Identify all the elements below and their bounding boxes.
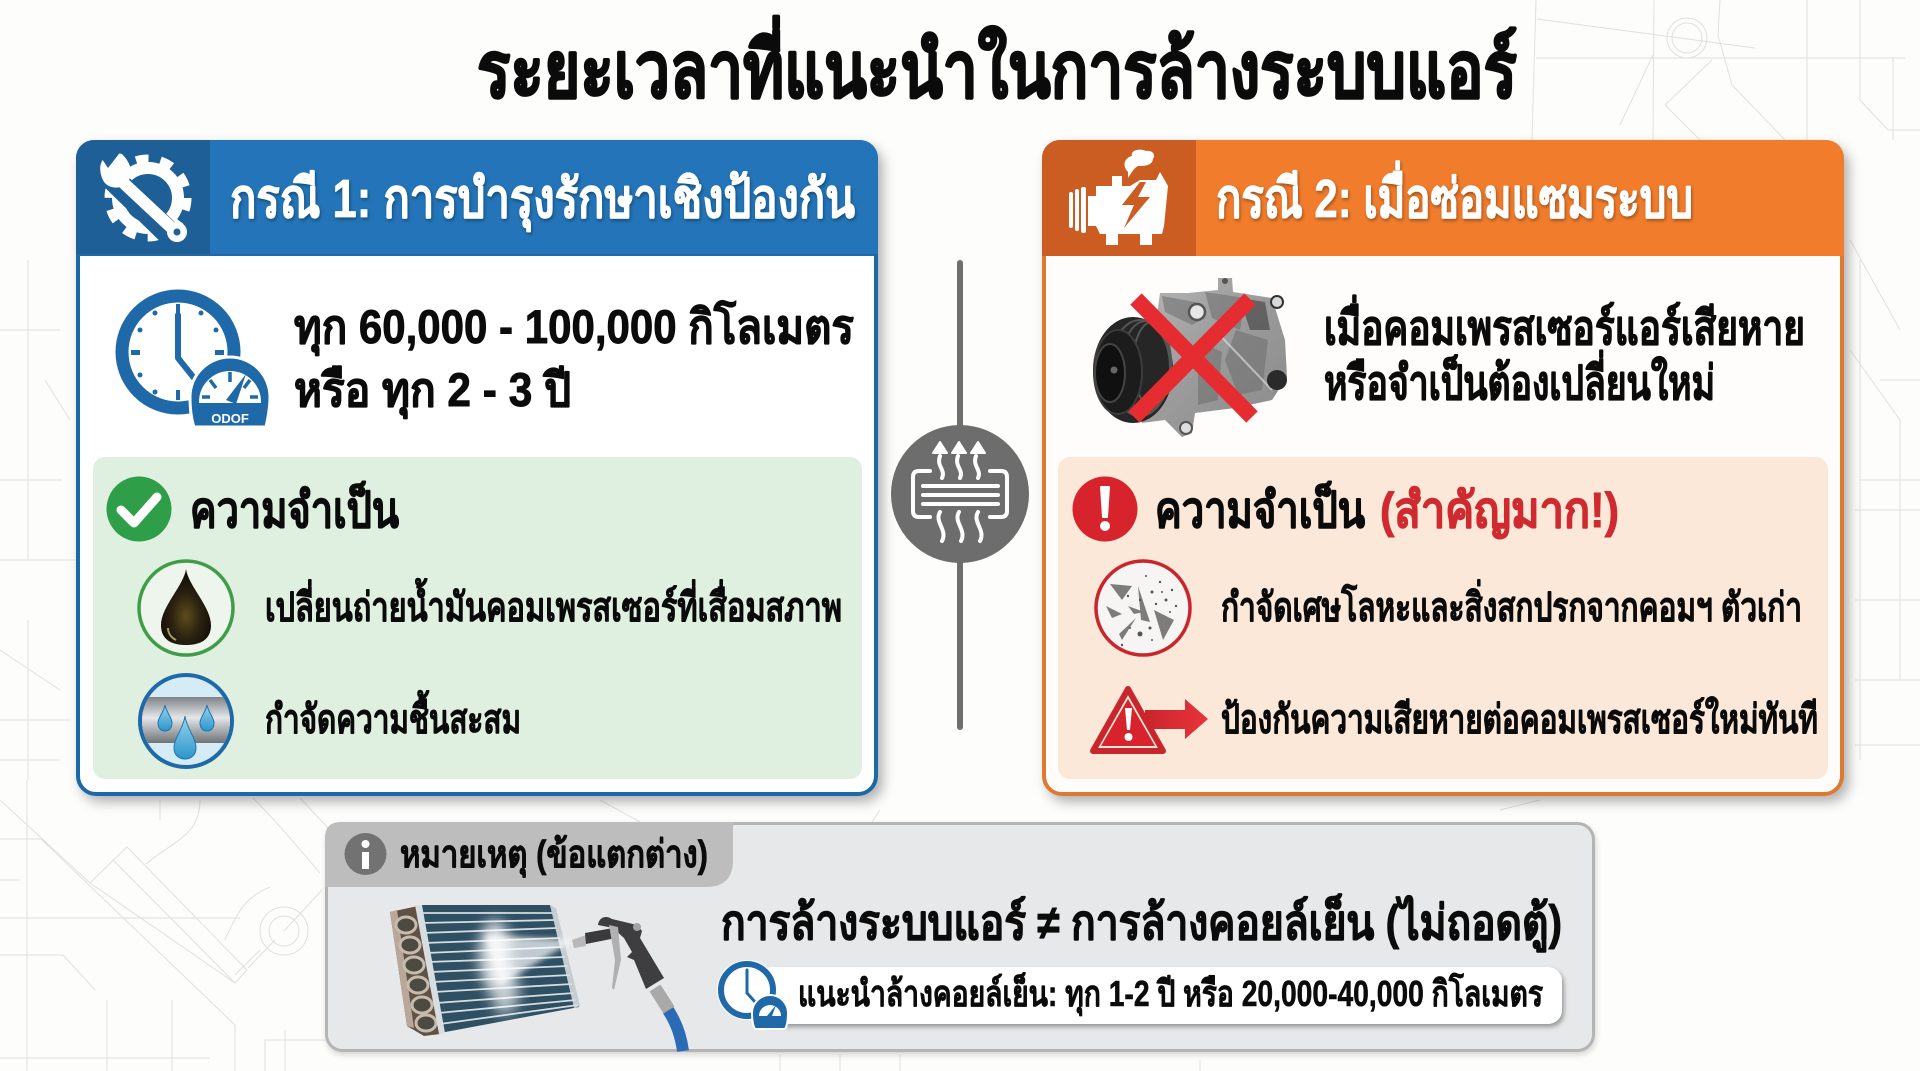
note heading: การล้างระบบแอร์ ≠ การล้างคอยล์เย็น (ไม่ถอดตู้) [721,893,1562,953]
necessity heading very important: (สำคัญมาก!) [1380,484,1619,539]
panel: case 2 when repairing [1042,140,1844,794]
icon: oil drop [139,561,233,655]
repair condition text: หรือจำเป็นต้องเปลี่ยนใหม่ [1324,349,1715,409]
interval text: ทุก 60,000 - 100,000 กิโลเมตร [294,299,854,356]
coil being sprayed [390,905,580,1036]
icon: warning with arrow [1093,689,1208,751]
necessity heading: ความจำเป็น [190,480,399,538]
item: remove moisture: กำจัดความชื้นสะสม [265,690,521,742]
panel 2 heading: กรณี 2: เมื่อซ่อมแซมระบบ [1216,160,1693,229]
interval text: หรือ ทุก 2 - 3 ปี [294,363,571,419]
icon: clock and odometer [122,296,270,427]
icon: gear and wrench [100,146,187,242]
note tab label: หมายเหตุ (ข้อแตกต่าง) [400,834,708,878]
icon: small clock and gauge [717,960,788,1029]
repair condition text [1324,294,1805,409]
icon: broken compressor [1069,150,1168,245]
icon: info [344,833,386,875]
necessity box green [93,457,862,779]
icon: clock and odometer: ODOF [211,411,249,426]
compressor crossed out [1093,278,1287,437]
repair condition text: เมื่อคอมเพรสเซอร์แอร์เสียหาย [1324,294,1805,354]
item: change oil: เปลี่ยนถ่ายน้ำมันคอมเพรสเซอร์ที่เสื่อมสภาพ [265,578,842,630]
necessity heading very important: ความจำเป็น [1155,480,1365,538]
icon: green check [106,476,172,542]
necessity box orange [1058,457,1828,779]
icon: moisture pipe [140,675,232,767]
note tab [325,822,733,887]
interval text [294,299,854,419]
panel: case 1 preventive maintenance [76,140,878,794]
necessity heading very important [1155,480,1619,539]
title: ระยะเวลาที่แนะนำในการล้างระบบแอร์ [477,15,1517,114]
icon: red exclamation [1072,476,1138,542]
divider with AC coil icon [891,260,1029,730]
recommendation pill [717,960,1562,1029]
panel: note about coil cleaning [325,822,1594,1051]
spray gun and hose [572,917,683,1051]
panel 1 header bar [76,140,878,256]
icon: metal debris [1096,561,1190,655]
recommendation text: แนะนำล้างคอยล์เย็น: ทุก 1-2 ปี หรือ 20,000-40,000 กิโลเมตร [798,971,1544,1017]
panel 1 heading: กรณี 1: การบำรุงรักษาเชิงป้องกัน [230,169,855,233]
panel 2 header bar [1042,140,1844,256]
